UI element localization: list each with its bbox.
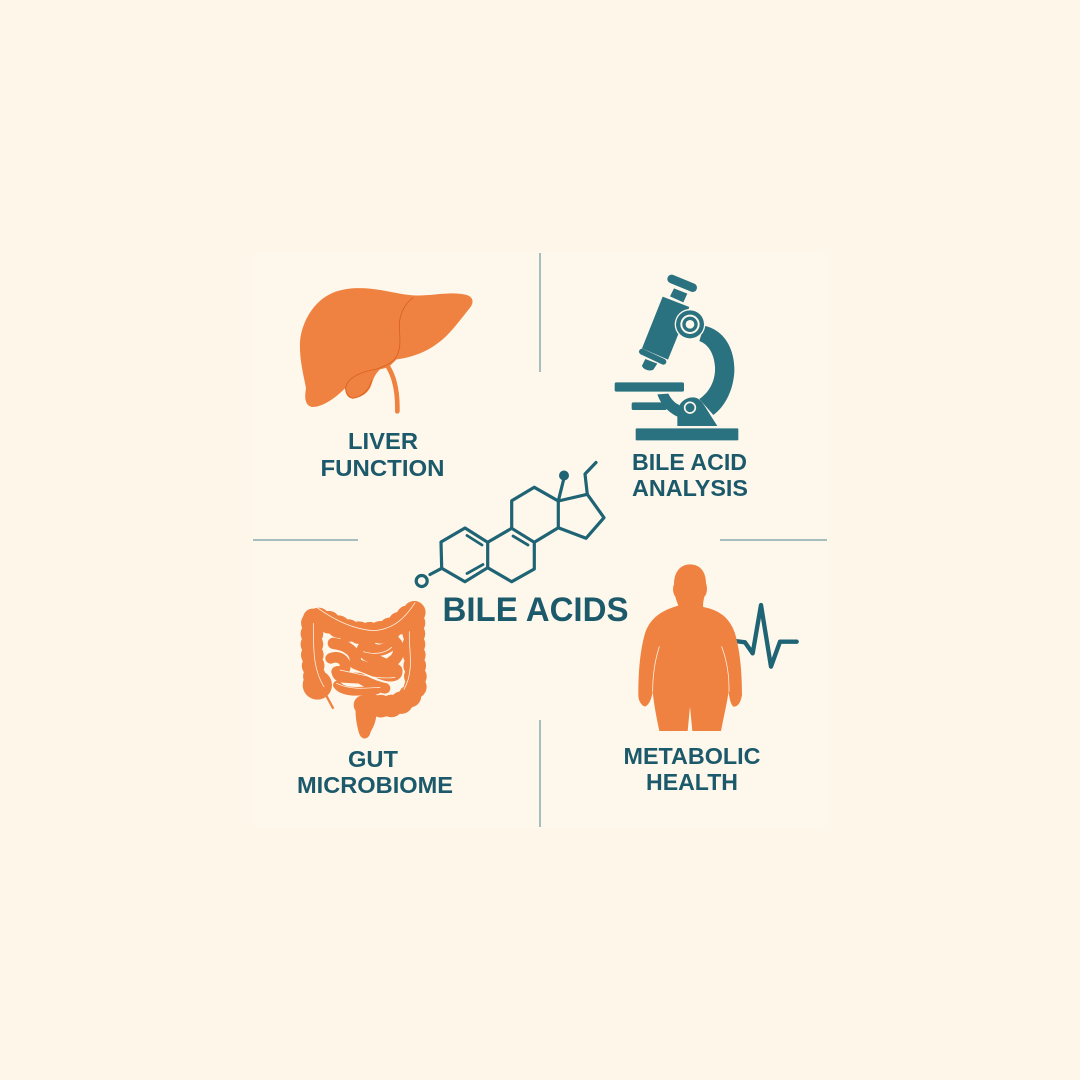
label: metabolic health: METABOLIC (624, 743, 761, 769)
label: liver function: LIVER (348, 428, 418, 454)
icon: person with pulse (638, 564, 797, 731)
panel: liver function (300, 288, 473, 481)
icon: pulse line (735, 605, 797, 667)
icon: intestines (303, 603, 416, 739)
heading: bile acids: BILE ACIDS (442, 591, 628, 629)
label: liver function: FUNCTION (320, 455, 444, 481)
label: gut microbiome: MICROBIOME (297, 772, 453, 798)
label: bile acid analysis: ANALYSIS (632, 475, 748, 501)
panel: metabolic health (624, 564, 797, 795)
label: gut microbiome: GUT (348, 746, 399, 772)
label: bile acid analysis: BILE ACID (632, 449, 747, 475)
panel: bile acid analysis (615, 279, 748, 501)
panel: gut microbiome (297, 603, 453, 798)
label: gut microbiome (297, 746, 453, 798)
label: metabolic health (624, 743, 761, 795)
icon: liver (300, 288, 473, 411)
label: bile acid analysis (632, 449, 748, 501)
icon: body silhouette (638, 564, 742, 731)
icon: steroid molecule (416, 462, 604, 586)
label: metabolic health: HEALTH (646, 769, 738, 795)
label: liver function (320, 428, 444, 481)
panel: central molecule (416, 462, 628, 629)
icon: microscope (615, 279, 738, 440)
